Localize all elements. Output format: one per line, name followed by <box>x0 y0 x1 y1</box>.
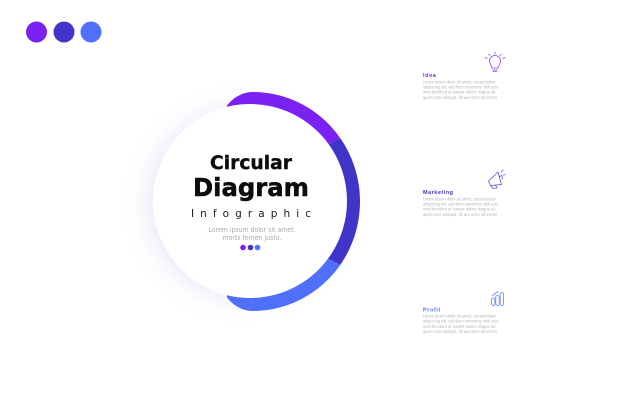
description: Lorem ipsum dolor sit amet, consectetuer <box>423 80 496 84</box>
label: Profit <box>423 308 441 314</box>
label: Idea <box>423 73 437 79</box>
circular diagram <box>144 92 360 311</box>
heading: Diagram <box>193 173 309 202</box>
description: mod tincidunt ut laoreet dolore magna ali- <box>423 324 496 329</box>
block: Profit <box>423 292 504 334</box>
description: Lorem ipsum dolor sit amet, consectetuer <box>423 314 496 318</box>
description: Lorem ipsum dolor sit amet, consectetuer <box>423 196 496 202</box>
icon: megaphone <box>488 170 505 188</box>
description: mod tincidunt ut laoreet dolore magna ali- <box>423 90 496 95</box>
description: quam erat volutpat. Ut wisi enim ad minim <box>423 95 497 100</box>
description: adipiscing elit, sed diam nonummy nibh euis- <box>423 85 499 90</box>
palette dots <box>26 22 102 42</box>
description: adipiscing elit, sed diam nonummy nibh euis- <box>423 319 499 324</box>
description: mod tincidunt ut laoreet dolore magna ali- <box>423 207 496 212</box>
block: Idea <box>423 52 505 100</box>
label: Marketing <box>423 190 453 196</box>
icon: bar chart <box>492 292 504 306</box>
description: quam erat volutpat. Ut wisi enim ad minim <box>423 329 497 334</box>
circle caption <box>208 226 296 242</box>
icon: light bulb <box>485 52 505 72</box>
block: Marketing <box>423 170 505 217</box>
heading <box>191 152 311 220</box>
small dots <box>240 245 260 250</box>
description <box>423 80 499 100</box>
description <box>423 314 499 334</box>
heading: Infographic <box>191 208 311 220</box>
description: adipiscing elit, sed diam nonummy nibh euis- <box>423 202 499 207</box>
heading: Circular <box>210 152 293 174</box>
description: quam erat volutpat. Ut wisi enim ad minim <box>423 212 497 217</box>
white circle <box>153 104 347 298</box>
circle shadow <box>145 105 341 301</box>
description <box>423 196 499 217</box>
circle caption: morbi femen justo. <box>222 234 282 242</box>
ring segments <box>227 92 360 311</box>
circle caption: Lorem ipsum dolor sit amet. <box>208 226 296 234</box>
